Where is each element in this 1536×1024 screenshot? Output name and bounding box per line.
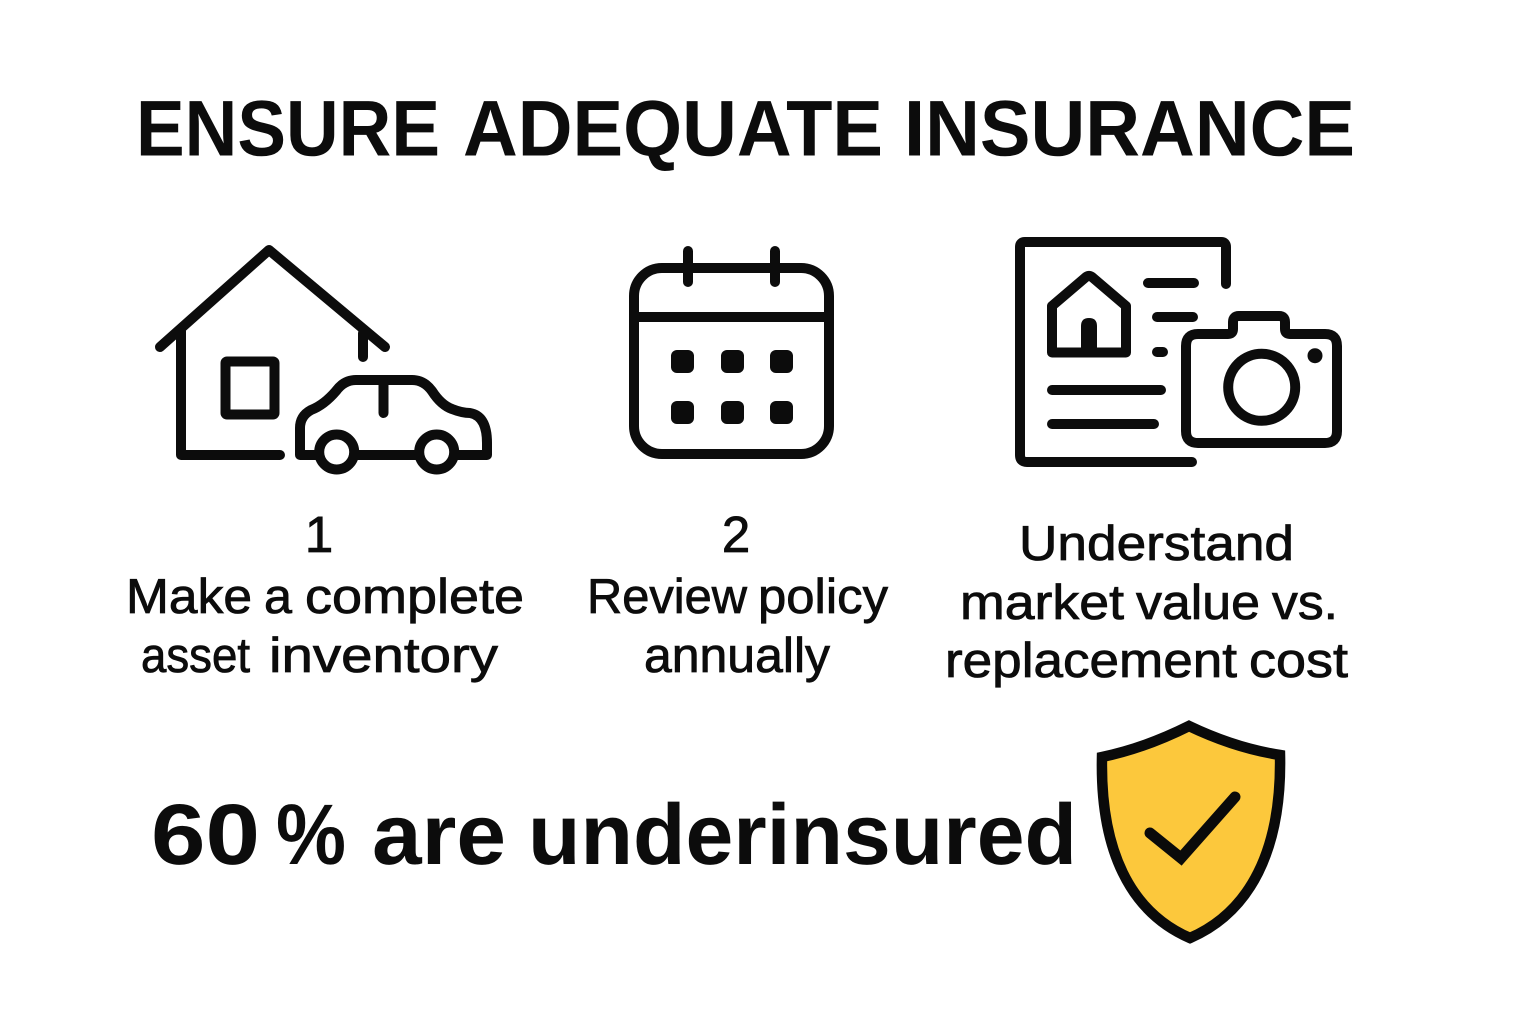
label: step 1 xyxy=(126,506,524,683)
icon: document and camera xyxy=(1020,242,1337,462)
statistic: underinsured xyxy=(528,787,1077,883)
title xyxy=(136,84,1355,172)
label: step 3 xyxy=(945,517,1348,688)
title: ADEQUATE xyxy=(463,84,883,172)
label: step 3: cost xyxy=(1249,634,1348,688)
label: step 1: Make xyxy=(126,570,252,624)
label: step 1: 1 xyxy=(305,506,333,563)
label: step 3: market xyxy=(960,576,1124,630)
title: ENSURE xyxy=(136,84,440,172)
label: step 1: asset xyxy=(141,629,250,683)
statistic: are xyxy=(372,787,506,883)
label: step 2: policy xyxy=(758,570,889,624)
label: step 3: replacement xyxy=(945,634,1237,688)
icon: shield with check xyxy=(1102,726,1280,938)
label: step 1: inventory xyxy=(269,629,499,683)
label: step 3: value xyxy=(1136,576,1260,630)
label: step 2 xyxy=(587,506,889,683)
statistic: % xyxy=(276,787,346,883)
label: step 3: vs. xyxy=(1272,576,1338,630)
label: step 3: Understand xyxy=(1019,517,1294,571)
icon: house and car xyxy=(160,250,487,470)
label: step 1: complete xyxy=(305,570,524,624)
icon: calendar xyxy=(634,251,829,454)
statistic: 60 xyxy=(151,787,260,883)
title: INSURANCE xyxy=(904,84,1355,172)
label: step 2: 2 xyxy=(722,506,750,563)
label: step 1: a xyxy=(264,570,293,624)
label: step 2: Review xyxy=(587,570,748,624)
label: step 2: annually xyxy=(644,629,831,683)
statistic xyxy=(151,787,1077,883)
